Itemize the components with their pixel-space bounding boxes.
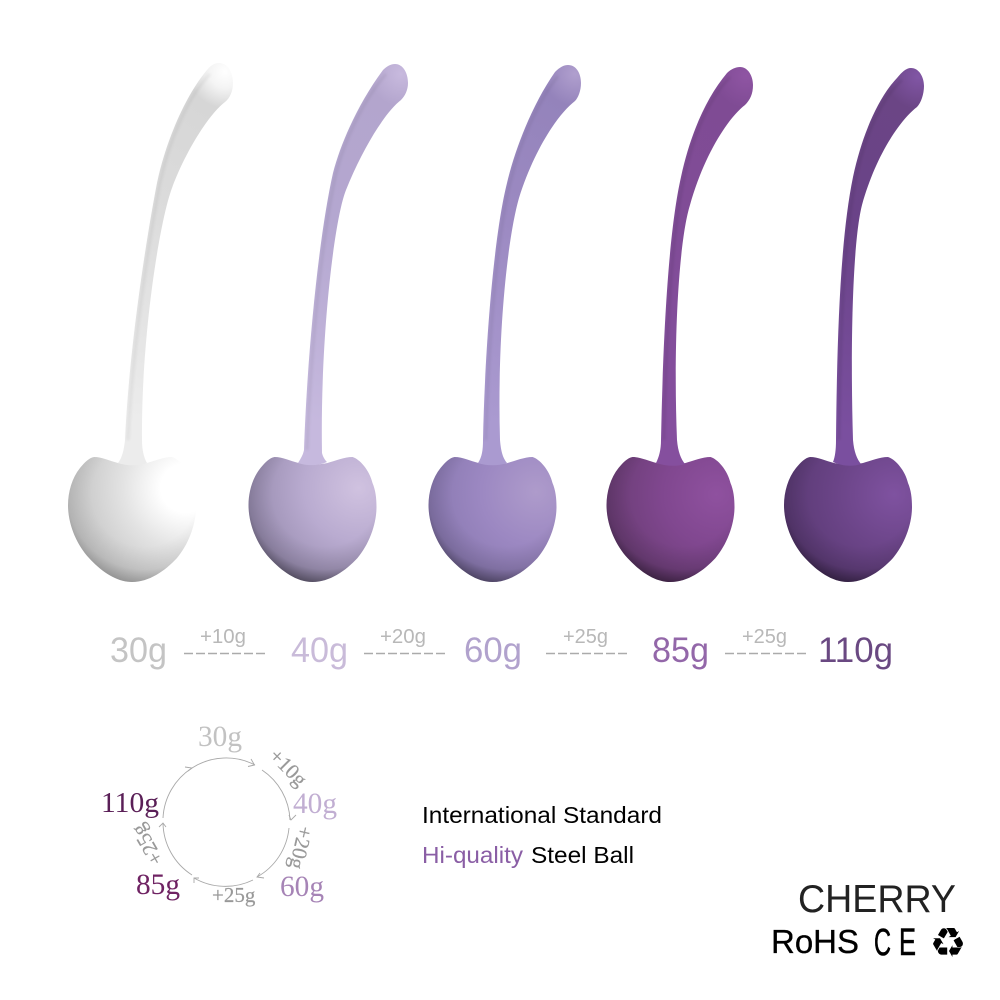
increment: +10g (184, 626, 267, 654)
cherry weight: purple 85g (606, 67, 753, 582)
feature: International Standard: International Standard (422, 802, 662, 828)
increment: +25g (725, 626, 808, 654)
ring label: 110g: 110g (101, 787, 159, 819)
CE mark: C (874, 922, 891, 964)
ring arrows (159, 758, 296, 886)
ring increment: +20g: +20g (284, 824, 318, 872)
cherry body: deep violet (784, 457, 912, 582)
increment: +10g: +10g (200, 626, 246, 648)
cherry stem: white (118, 63, 233, 465)
icon: recycling symbol: ♻ (930, 919, 966, 967)
increment: +25g: +25g (563, 626, 608, 648)
cherry stem: lavender (478, 65, 581, 465)
ring increment: +10g: +10g (264, 744, 312, 792)
ring increment: +25g reversed: +25g (126, 820, 168, 870)
ring label: 60g: 60g (280, 870, 324, 903)
cherry body: white (68, 457, 196, 582)
cherry weight: lavender 60g (428, 65, 581, 582)
ring label: 40g: 40g (293, 787, 337, 820)
certification row (771, 919, 966, 967)
weight label: 30g: 30g (110, 631, 167, 670)
ring increment: +25g: +25g (212, 883, 256, 907)
increment: +25g: +25g (742, 626, 787, 648)
cherry body: purple (606, 457, 734, 582)
increment: +25g (546, 626, 629, 654)
CE mark (874, 922, 916, 964)
ring label: 30g: 30g (198, 720, 242, 753)
weight label: 40g: 40g (291, 631, 348, 670)
increment: +20g (364, 626, 447, 654)
RoHS mark: RoHS (771, 923, 859, 960)
cherry stem: pale lilac (298, 64, 408, 465)
ring label: 85g: 85g (136, 868, 180, 901)
cherry stem: purple (656, 67, 753, 466)
cherry weight: deep violet 110g (784, 68, 924, 582)
weight label: 85g: 85g (652, 631, 709, 670)
weight label: 60g: 60g (464, 631, 522, 670)
cherry body: pale lilac (248, 457, 376, 582)
increment: +20g: +20g (380, 626, 426, 648)
product name: CHERRY: CHERRY (798, 878, 956, 921)
circular progression diagram (101, 720, 337, 907)
feature: Hi-quality Steel Ball: Steel Ball (531, 842, 634, 868)
weight progression row (110, 626, 893, 670)
cherry body: lavender (428, 457, 556, 582)
feature: Hi-quality Steel Ball (422, 842, 634, 868)
CE mark: E (899, 922, 916, 964)
feature: Hi-quality Steel Ball: Hi-quality (422, 842, 524, 868)
weight label: 110g: 110g (818, 631, 893, 670)
feature text (422, 802, 662, 868)
cherry weight: pale lilac 40g (248, 64, 408, 582)
cherry stem: deep violet (833, 68, 924, 466)
cherry weight: white 30g (68, 63, 233, 582)
